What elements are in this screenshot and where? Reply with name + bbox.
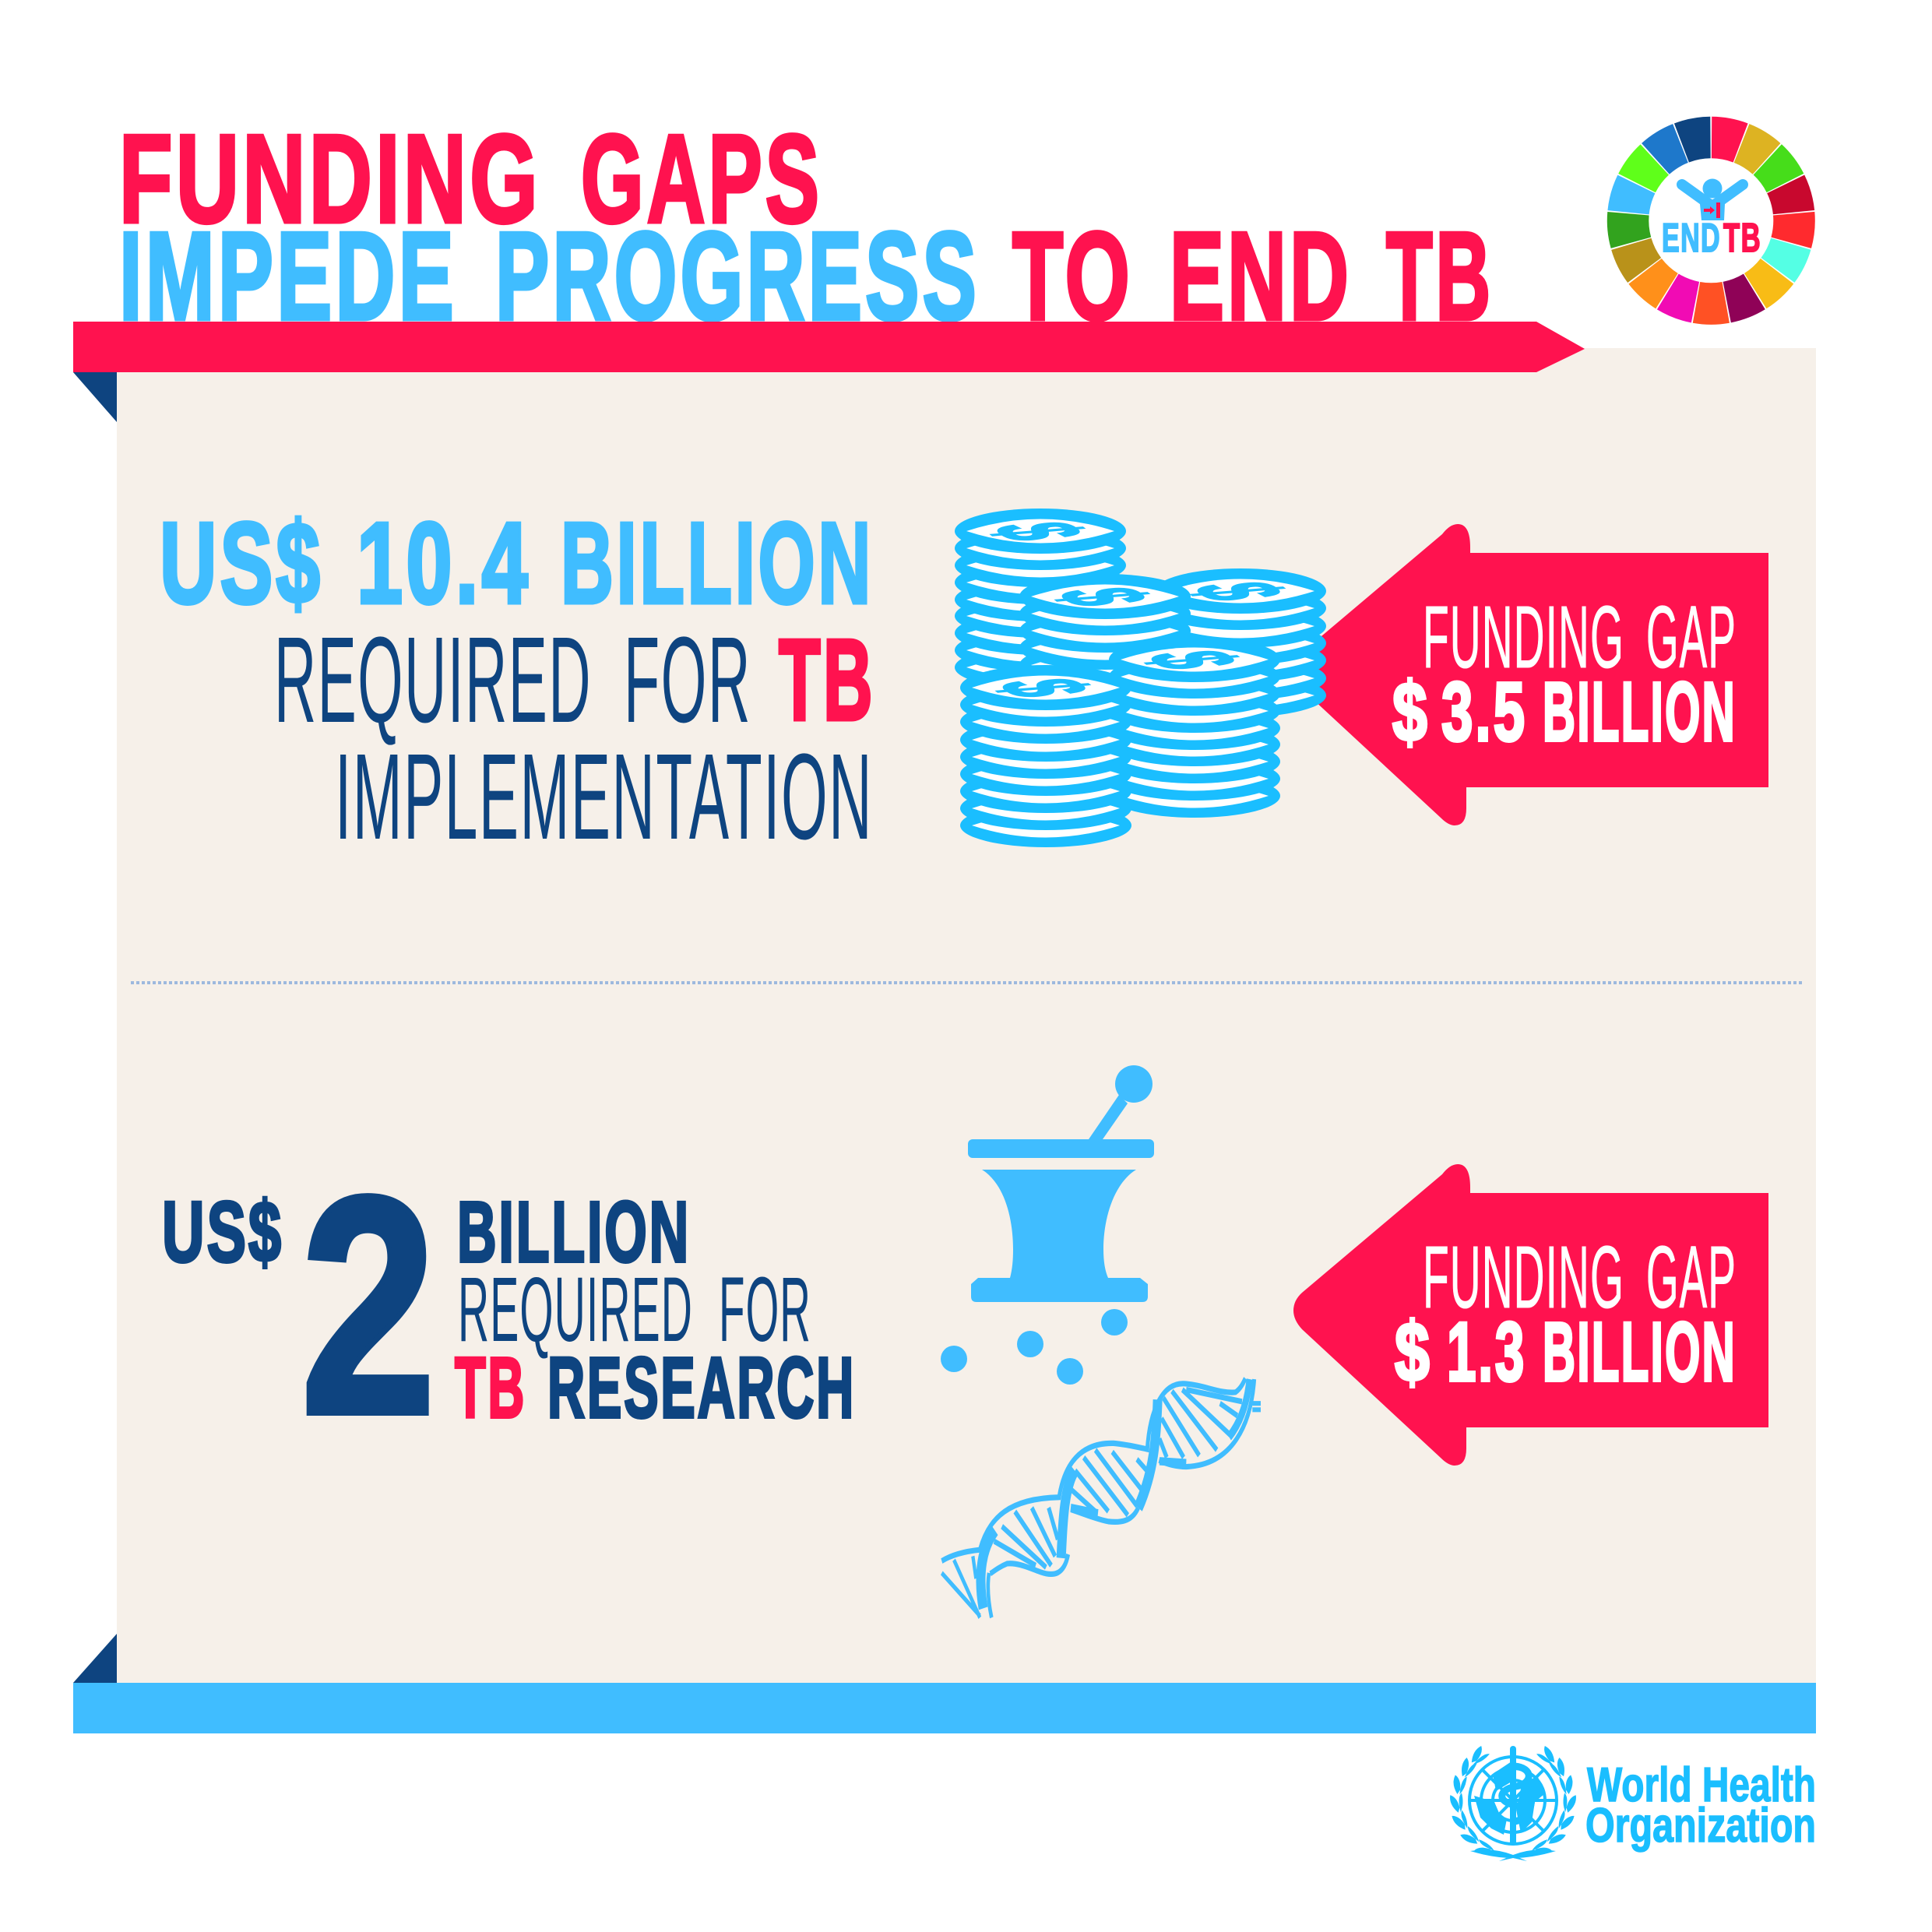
text block: US$ 2 billion required for TB research: RESEARCH — [547, 1340, 856, 1436]
blue bottom banner — [73, 1683, 1816, 1733]
title: GAPS — [581, 109, 822, 249]
top fold triangle — [73, 372, 117, 422]
arrow: funding gap 1.3 billion: 1.3 — [1447, 1304, 1526, 1399]
text block: US$ 2 billion required for TB research — [162, 1133, 856, 1479]
title: PROGRESS — [495, 206, 980, 347]
stack of coins: front right: $ — [1120, 647, 1264, 673]
arrow: funding gap 3.5 billion: $ — [1392, 664, 1430, 758]
title: END — [1170, 206, 1352, 347]
icon: End TB wheel logo — [1593, 103, 1828, 338]
title: TO — [1012, 206, 1133, 347]
arrow: funding gap 3.5 billion: GAP — [1646, 588, 1737, 686]
text block: US$ 2 billion required for TB research: FOR — [719, 1258, 811, 1361]
text: World Health Organization — [1585, 1758, 1816, 1853]
text block: US$ 10.4 billion required: FOR — [624, 612, 751, 748]
icon: coin stacks — [955, 509, 1326, 847]
text: IMPLEMENTATION — [335, 729, 873, 865]
stack of coins: back middle — [1019, 574, 1191, 687]
text block: US$ 10.4 billion required: 10.4 — [357, 499, 531, 628]
title — [119, 109, 1494, 347]
icon: End TB wheel logo: TB — [1723, 216, 1761, 261]
arrow: funding gap 1.3 billion: BILLION — [1543, 1304, 1737, 1399]
text: World Health Organization: Organization — [1585, 1799, 1816, 1853]
stack of coins: back right: $ — [1166, 579, 1310, 604]
icon: End TB wheel logo: END — [1662, 216, 1721, 261]
text block: US$ 10.4 billion required — [160, 499, 875, 865]
panel: beige background — [117, 348, 1816, 1683]
arrow: funding gap 1.3 billion — [1293, 1164, 1768, 1466]
title: FUNDING — [119, 109, 541, 249]
arrow: funding gap 1.3 billion: $ — [1395, 1304, 1432, 1399]
text block: US$ 10.4 billion required: TB — [779, 616, 875, 744]
arrow: funding gap 3.5 billion: BILLION — [1543, 664, 1737, 758]
red arrow banner — [73, 322, 1585, 372]
stack of coins: back left: $ — [966, 519, 1110, 544]
icon: DNA helix — [941, 1378, 1261, 1617]
arrow: funding gap 3.5 billion: 3.5 — [1441, 664, 1527, 758]
arrow: funding gap 1.3 billion: GAP — [1646, 1228, 1737, 1326]
stack of coins: front left: $ — [971, 675, 1115, 701]
text block: US$ 2 billion required for TB research: US$ — [162, 1184, 283, 1280]
stack of coins: front right — [1109, 637, 1280, 818]
title: IMPEDE — [119, 206, 457, 347]
arrow: funding gap 3.5 billion — [1293, 524, 1768, 825]
text block: US$ 10.4 billion required: US$ — [160, 499, 323, 628]
text block: US$ 10.4 billion required: REQUIRED — [274, 612, 592, 748]
arrow: funding gap 1.3 billion: FUNDING — [1423, 1228, 1624, 1326]
text: World Health Organization: World Health — [1587, 1758, 1816, 1812]
title: TB — [1386, 206, 1494, 347]
text block: US$ 2 billion required for TB research: BILLION — [457, 1184, 691, 1280]
text block: US$ 10.4 billion required: BILLION — [561, 499, 874, 628]
stack of coins: front left — [960, 665, 1131, 847]
text block: US$ 2 billion required for TB research: TB — [455, 1340, 526, 1436]
stack of coins: back right — [1155, 568, 1326, 717]
bottom fold triangle — [73, 1634, 117, 1683]
icon: mortar and pestle — [941, 1065, 1154, 1385]
text block: US$ 2 billion required for TB research: 2 — [301, 1133, 436, 1479]
stack of coins: back middle: $ — [1030, 584, 1174, 610]
stack of coins: back left — [955, 509, 1126, 689]
icon: WHO emblem — [1449, 1745, 1577, 1861]
text block: US$ 2 billion required for TB research: REQUIRED — [458, 1258, 693, 1361]
arrow: funding gap 3.5 billion: FUNDING — [1423, 588, 1624, 686]
